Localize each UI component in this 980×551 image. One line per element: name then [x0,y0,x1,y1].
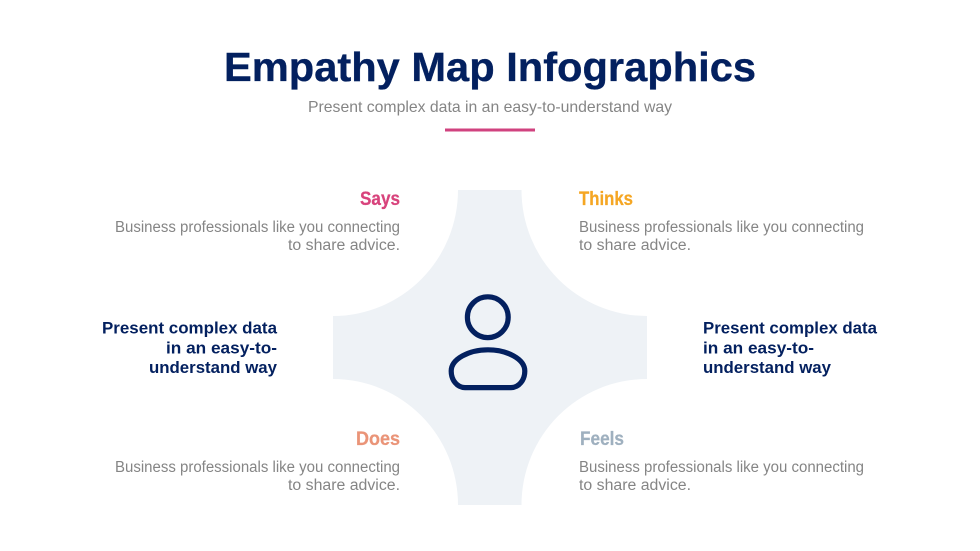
icon: person [451,297,525,388]
left callout text: understand way [149,359,278,377]
right callout text: in an easy-to- [703,340,814,358]
says body text: to share advice. [288,237,400,254]
panel: does [115,429,400,494]
does body text [115,459,400,494]
feels heading: Feels [580,429,624,450]
right callout text: understand way [703,359,832,377]
subtitle: Present complex data in an easy-to-understand way [308,99,672,116]
panel: thinks [579,189,864,254]
thinks body text [579,219,864,254]
does body text: to share advice. [288,477,400,494]
says body text: Business professionals like you connecting [115,219,400,236]
left callout text: Present complex data [102,320,278,338]
does heading: Does [356,429,400,450]
thinks heading: Thinks [579,189,633,210]
panel: says [115,189,400,254]
panel: feels [579,429,864,494]
feels body text: Business professionals like you connecting [579,459,864,476]
thinks body text: to share advice. [579,237,691,254]
title: Empathy Map Infographics [224,44,756,90]
right callout text: Present complex data [703,320,878,338]
left callout text [102,320,278,377]
feels body text [579,459,864,494]
feels body text: to share advice. [579,477,691,494]
central four-point cross shape [333,190,647,505]
says body text [115,219,400,254]
right callout text [703,320,878,377]
says heading: Says [360,189,400,210]
title underline accent [445,128,535,132]
does body text: Business professionals like you connecting [115,459,400,476]
thinks body text: Business professionals like you connecting [579,219,864,236]
left callout text: in an easy-to- [166,340,277,358]
